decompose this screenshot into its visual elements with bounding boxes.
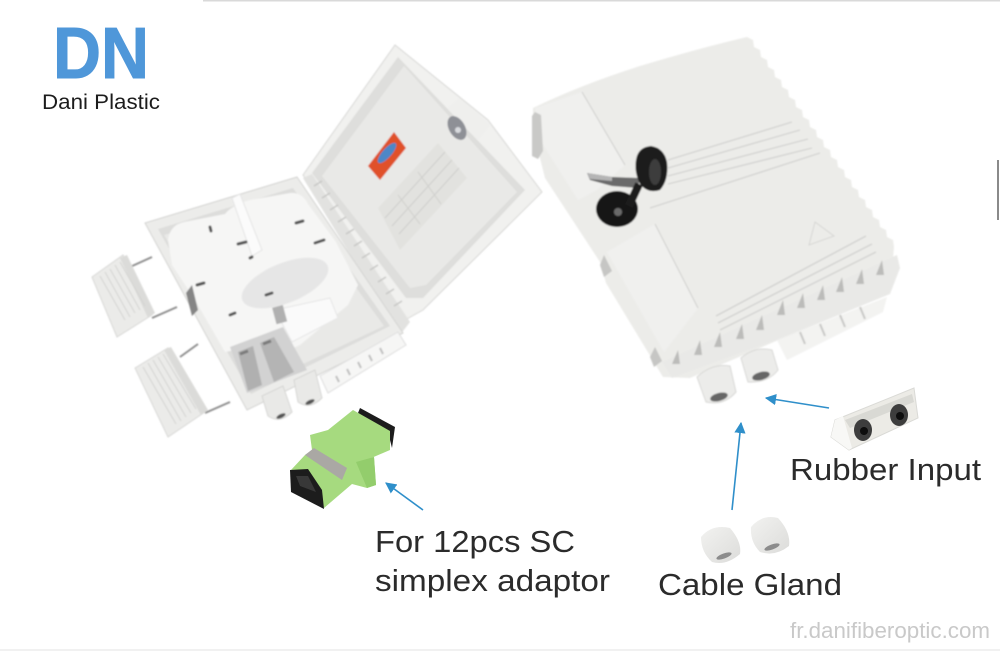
door panels <box>535 92 625 200</box>
wires <box>130 257 230 413</box>
cable glands (loose) <box>701 517 789 563</box>
base <box>145 177 403 410</box>
arrow: adaptor <box>386 483 423 510</box>
arrow: rubber input <box>766 398 829 408</box>
hinge strip <box>303 174 410 335</box>
open fibre box (left product) <box>92 45 542 437</box>
arrow: cable gland <box>732 423 741 510</box>
red label <box>368 132 406 180</box>
label: cable gland: Cable Gland <box>658 567 842 602</box>
port block <box>777 297 887 360</box>
label: rubber input: Rubber Input <box>790 452 981 487</box>
body <box>533 37 894 378</box>
glands <box>697 349 778 403</box>
logo: DN Dani Plastic: Dani Plastic <box>42 91 160 114</box>
label: adaptor: simplex adaptor <box>375 563 610 598</box>
tray slots <box>197 221 324 315</box>
bottom fins <box>662 255 900 378</box>
grooves <box>650 122 820 208</box>
lock and key <box>587 146 667 227</box>
lower latch <box>135 347 208 437</box>
port block <box>320 332 406 393</box>
label: adaptor: For 12pcs SC <box>375 524 575 559</box>
upper latch <box>92 255 155 337</box>
lid <box>303 45 542 320</box>
label: adaptor <box>375 524 610 598</box>
warning triangle <box>809 222 834 245</box>
SC simplex adaptor <box>290 408 395 509</box>
metal brackets <box>230 327 307 393</box>
glands <box>262 370 322 420</box>
lock bracket <box>448 98 490 140</box>
logo: DN Dani Plastic: DN <box>53 14 149 94</box>
watermark: fr.danifiberoptic.com <box>790 618 990 643</box>
instruction sheet <box>378 143 467 250</box>
splice tray <box>168 193 358 352</box>
hinges <box>532 112 543 159</box>
closed fibre box (right product) <box>532 37 900 403</box>
rubber input <box>831 388 918 450</box>
